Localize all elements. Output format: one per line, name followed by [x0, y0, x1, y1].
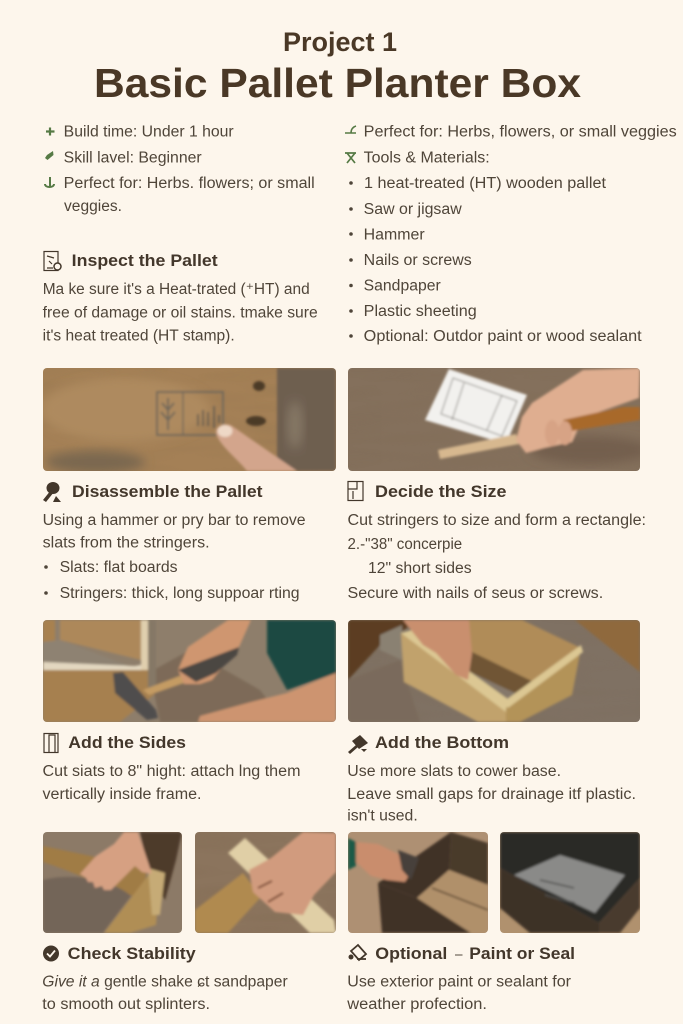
icon: crossed tools [345, 153, 356, 163]
title [94, 27, 581, 106]
materials list: Sandpaper [364, 278, 441, 295]
text block: Stringers: thick, long suppoar rting [60, 585, 300, 602]
heading: Disassemble the Pallet [72, 482, 263, 501]
text block: slats from the stringers. [43, 534, 210, 552]
icon: hammer [43, 482, 61, 502]
panel: tools and materials [345, 124, 677, 345]
panel: project overview: veggies. [64, 198, 122, 215]
photo: painting box [348, 832, 488, 933]
text block: weather profection. [346, 996, 487, 1013]
text block: Slats: flat boards [60, 559, 178, 576]
heading: Add the Sides [68, 733, 186, 752]
materials list: Hammer [364, 226, 425, 244]
panel: check stability [42, 944, 288, 1013]
text block: Ma ke sure it's a Heat-trated (⁺HT) and [43, 281, 310, 298]
text block: Give it a gentle shake ɕt sandpaper [42, 974, 288, 991]
materials list: Plastic sheeting [364, 303, 477, 320]
text block: to smooth out splinters. [42, 996, 210, 1013]
icon: leaf tool [345, 126, 356, 133]
icon: mallet [348, 735, 368, 754]
text block: Use more slats to cower base. [347, 763, 561, 780]
heading: Decide the Size [375, 482, 506, 501]
panel: tools and materials: Tools & Materials: [364, 150, 490, 166]
icon: upright slats [44, 734, 58, 752]
heading: Optional [375, 944, 447, 963]
panel: project overview: Skill lavel: Beginner [64, 150, 202, 166]
panel: tools and materials: Perfect for: Herbs, flowers, or small veggies [364, 124, 677, 140]
title: Project 1 [283, 27, 397, 57]
text block: 12" short sides [368, 560, 472, 577]
panel: optional paint or seal [346, 944, 575, 1013]
photo: size sketch and ruler [348, 368, 650, 471]
icon: plan [348, 482, 363, 500]
text block [348, 512, 646, 602]
panel: add the sides [42, 733, 300, 803]
heading: Check Stability [68, 944, 196, 963]
icon: check badge [43, 946, 59, 962]
icon: sprout [45, 177, 54, 187]
panel: project overview: Build time: Under 1 hour [64, 124, 234, 140]
text block: Using a hammer or pry bar to remove [43, 512, 306, 529]
text block [43, 281, 318, 345]
heading: Inspect the Pallet [72, 251, 218, 270]
photo: sealed box with liner [500, 832, 640, 933]
photo: hammering slats [43, 620, 336, 722]
icon: pencil [45, 151, 54, 160]
icon: paint tools [348, 945, 366, 960]
photo: checking stability [43, 832, 182, 933]
materials list: Nails or screws [364, 252, 472, 269]
title: Basic Pallet Planter Box [94, 60, 581, 106]
panel: disassemble the pallet [43, 482, 306, 602]
text block: free of damage or oil stains. tmake sure [43, 305, 318, 322]
text block [346, 974, 571, 1013]
text block: Use exterior paint or sealant for [347, 974, 571, 991]
photo: frame assembled [348, 620, 640, 722]
text block [42, 763, 300, 803]
heading: Paint or Seal [469, 944, 575, 963]
materials list: Optional: Outdor paint or wood sealant [364, 328, 642, 345]
text block [43, 512, 306, 602]
panel: project overview: Perfect for: Herbs. flowers; or small [64, 175, 315, 192]
text block: Leave small gaps for drainage itf plastic. [347, 786, 636, 803]
text block: Secure with nails of seus or screws. [348, 585, 603, 602]
panel: project overview [45, 124, 315, 215]
icon: plus [46, 128, 54, 136]
panel: inspect the pallet [43, 251, 318, 345]
photo: pallet HT stamp [40, 368, 336, 473]
text block: 2.-"38" concerpie [348, 536, 462, 553]
heading [375, 944, 575, 963]
materials list: 1 heat-treated (HT) wooden pallet [364, 175, 607, 192]
panel: add the bottom [347, 733, 636, 825]
text block: Cut stringers to size and form a rectangle: [348, 512, 646, 529]
text block: Cut siats to 8" hight: attach lng them [42, 763, 300, 780]
text block [347, 763, 636, 825]
icon: inspect [44, 252, 61, 270]
text block: vertically inside frame. [42, 786, 202, 803]
text block: isn't used. [347, 808, 418, 825]
text block: it's heat treated (HT stamp). [43, 328, 235, 345]
heading: Add the Bottom [375, 733, 509, 752]
materials list: Saw or jigsaw [364, 201, 463, 218]
text block [42, 974, 288, 1013]
materials list [349, 175, 642, 345]
panel: decide the size [348, 482, 646, 602]
photo: sanding edge [195, 832, 336, 933]
